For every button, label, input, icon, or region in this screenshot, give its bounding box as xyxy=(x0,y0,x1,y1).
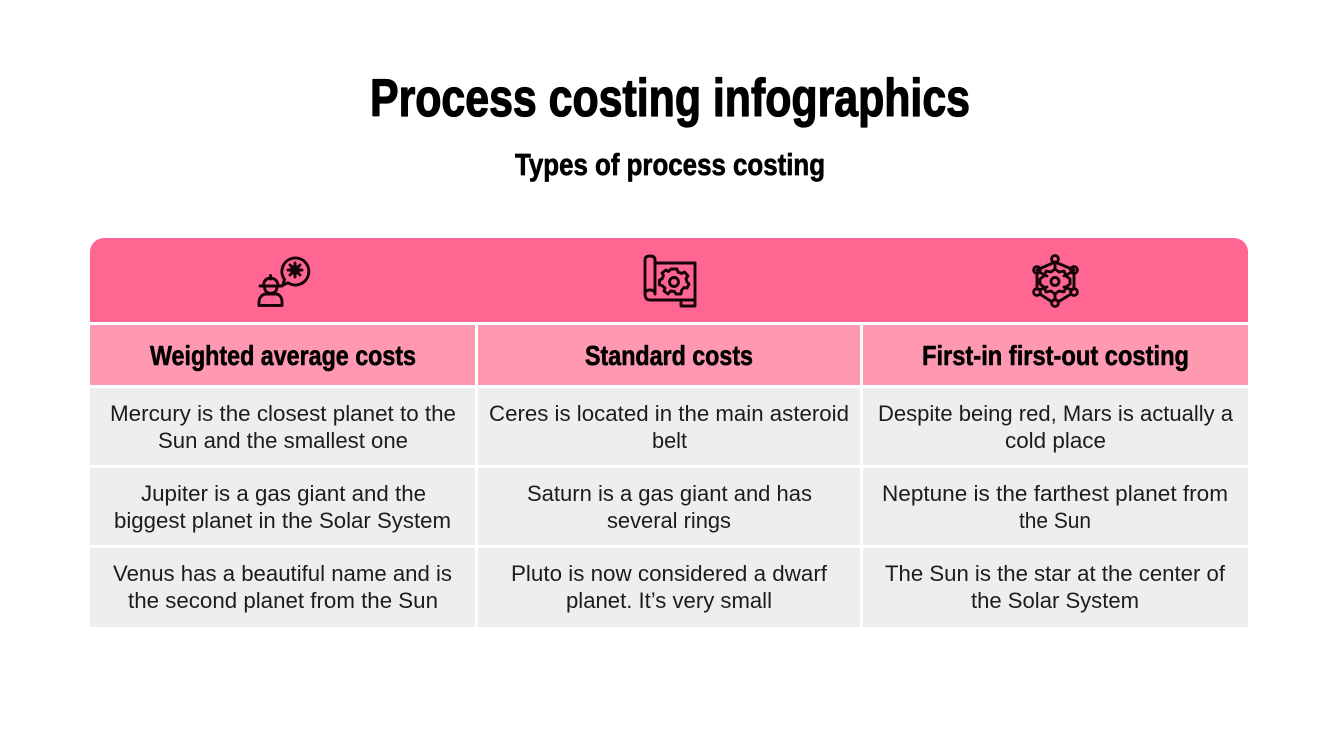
cell: neptune xyxy=(863,468,1248,545)
cell: sun xyxy=(863,548,1248,627)
icon: worker with gear speech bubble xyxy=(259,258,309,306)
cell: venus: the second planet from the Sun xyxy=(128,588,438,613)
cell: ceres: belt xyxy=(652,428,687,453)
cell: sun: The Sun is the star at the center of xyxy=(885,561,1226,586)
icon band xyxy=(90,238,1248,322)
column heading: standard costs xyxy=(478,325,860,385)
cell: saturn: Saturn is a gas giant and has xyxy=(527,481,812,506)
cell: jupiter xyxy=(90,468,475,545)
column heading: weighted average costs: Weighted average costs xyxy=(150,340,416,371)
cell: venus: Venus has a beautiful name and is xyxy=(113,561,452,586)
cell: mars: cold place xyxy=(1005,428,1106,453)
cell: sun: the Solar System xyxy=(971,588,1139,613)
cell: ceres xyxy=(478,388,860,465)
cell: pluto: planet. It’s very small xyxy=(566,588,772,613)
cell: mercury: Sun and the smallest one xyxy=(158,428,408,453)
cell: ceres: Ceres is located in the main asteroid xyxy=(489,401,849,426)
table xyxy=(90,238,1248,627)
cell: mercury xyxy=(90,388,475,465)
cell: jupiter: biggest planet in the Solar System xyxy=(114,508,451,533)
column heading: first-in first-out costing: First-in first-out costing xyxy=(922,340,1189,371)
cell: jupiter: Jupiter is a gas giant and the xyxy=(141,481,426,506)
title: Process costing infographics xyxy=(370,69,970,128)
cell: mars: Despite being red, Mars is actually a xyxy=(878,401,1234,426)
cell: venus xyxy=(90,548,475,627)
column heading: standard costs: Standard costs xyxy=(585,340,753,371)
column heading: first-in first-out costing xyxy=(863,325,1248,385)
subtitle: Types of process costing xyxy=(515,147,825,182)
column heading: weighted average costs xyxy=(90,325,475,385)
cell: neptune: the Sun xyxy=(1019,508,1091,533)
cell: mars xyxy=(863,388,1248,465)
cell: neptune: Neptune is the farthest planet from xyxy=(882,481,1228,506)
icon: blueprint with gear xyxy=(645,256,695,306)
icon: hexagonal gear network xyxy=(1034,256,1077,306)
cell: pluto xyxy=(478,548,860,627)
cell: saturn: several rings xyxy=(607,508,731,533)
cell: saturn xyxy=(478,468,860,545)
cell: pluto: Pluto is now considered a dwarf xyxy=(511,561,828,586)
cell: mercury: Mercury is the closest planet to the xyxy=(110,401,456,426)
